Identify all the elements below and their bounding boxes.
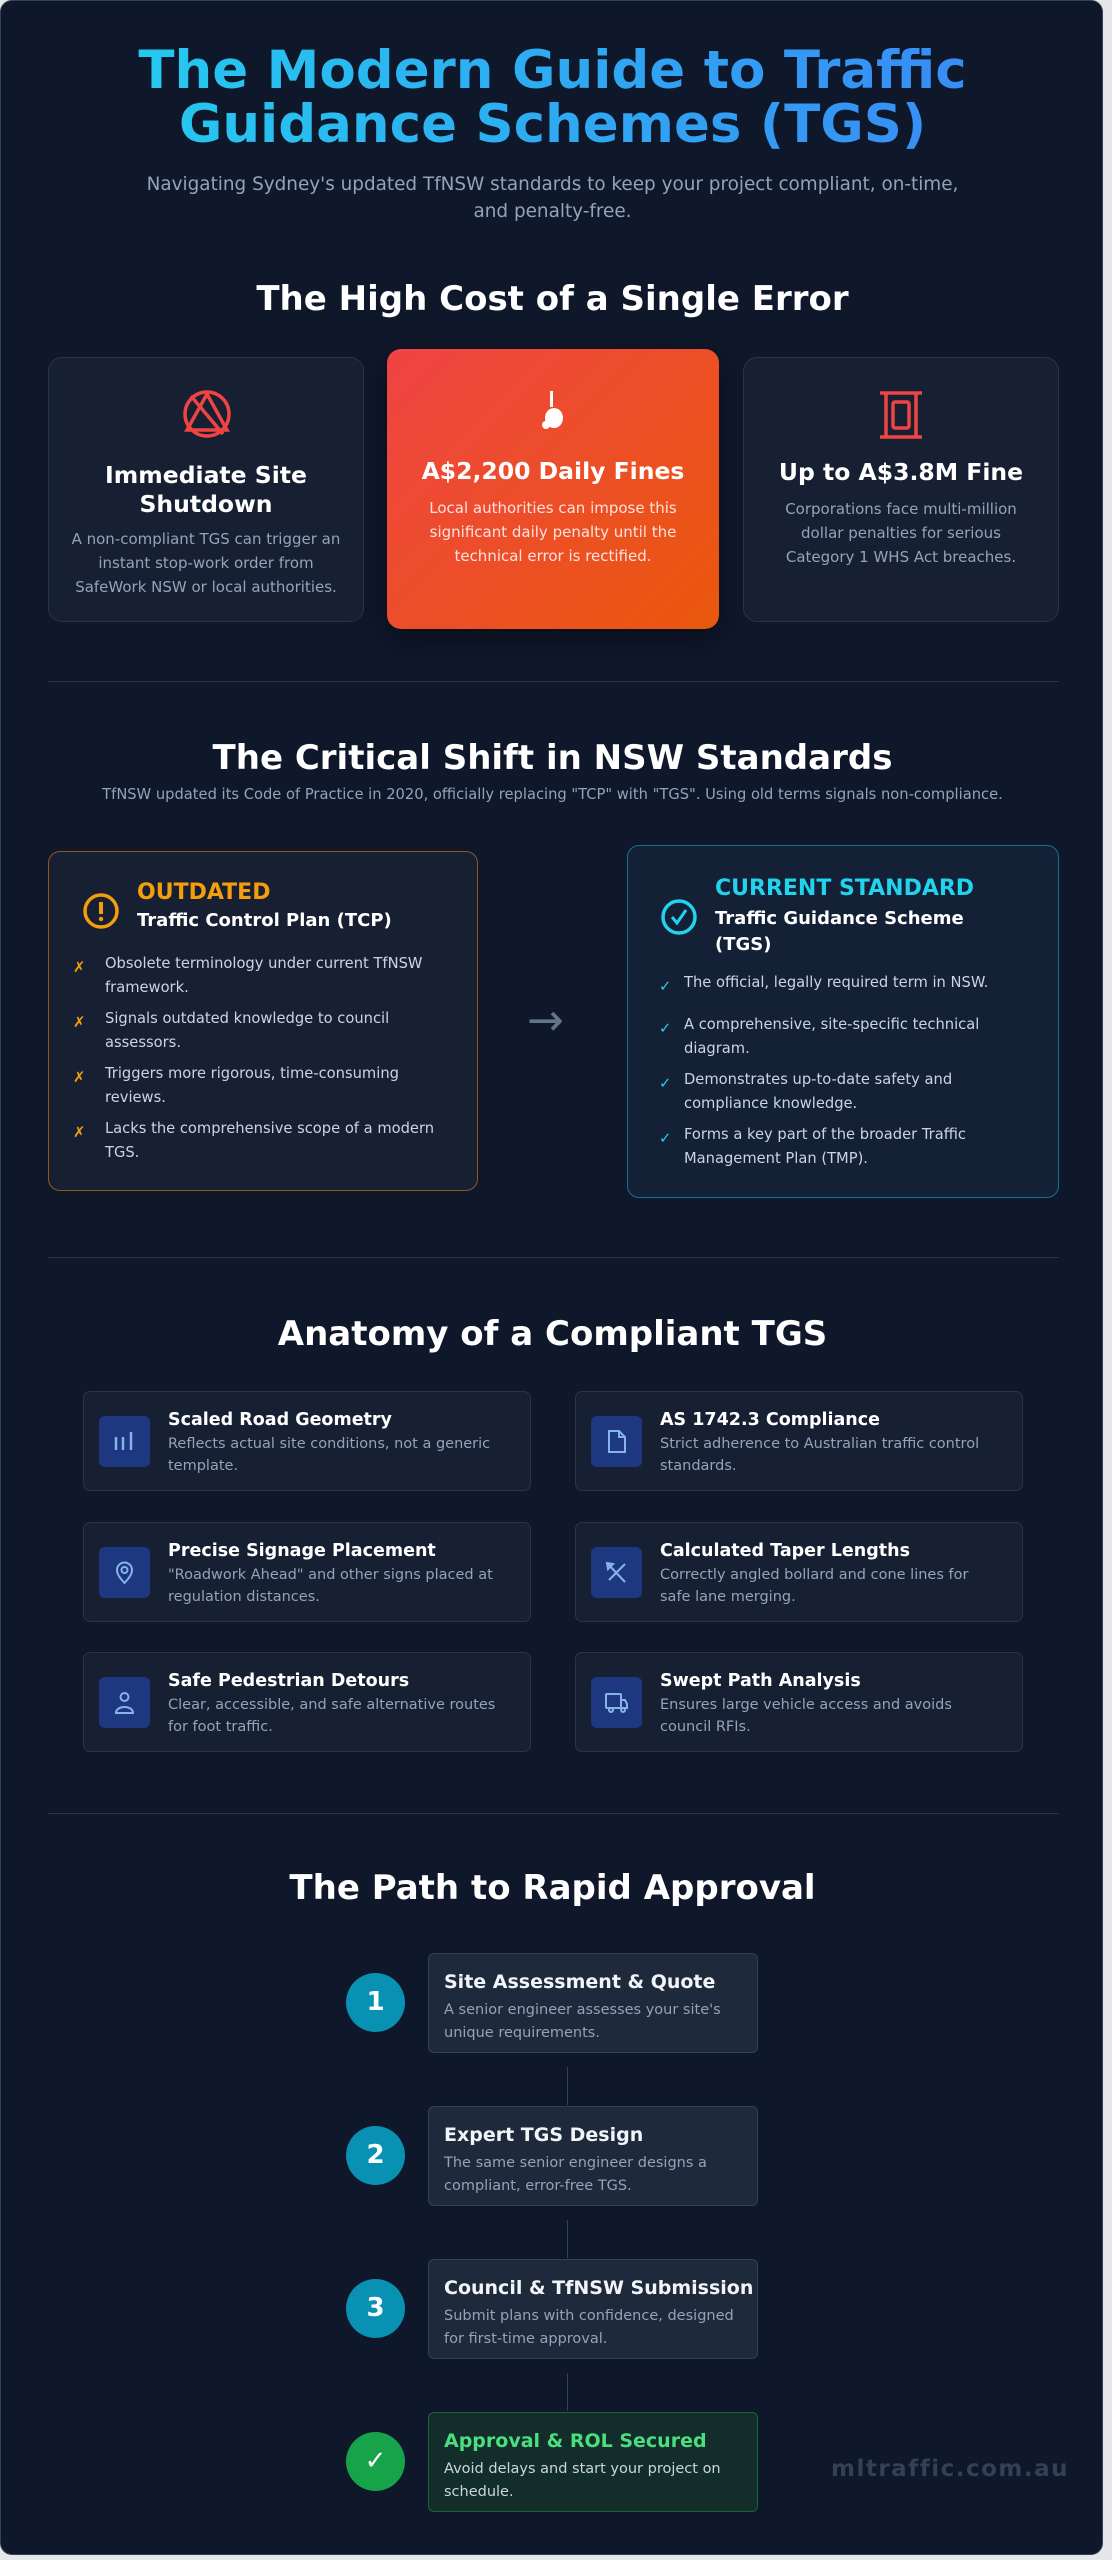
icon: shutdown (183, 390, 231, 438)
icon: hand (542, 391, 563, 429)
feature: AS 1742.3 (575, 1391, 1023, 1491)
step 4: approval: Approval & ROL Secured (444, 2430, 707, 2452)
panel: outdated (48, 851, 478, 1191)
card: 3.8M fine: Up to A$3.8M Fine (779, 458, 1023, 486)
icon: building (880, 391, 922, 439)
card: site shutdown (48, 357, 364, 622)
watermark: mltraffic.com.au (831, 2456, 1069, 2482)
step 3 (346, 2259, 758, 2359)
step 3: Submit plans with confidence, designed for first-time approval. (444, 2308, 734, 2347)
panel: outdated: ✗ (73, 1014, 85, 1031)
list: current points: A comprehensive, site-specific technical diagram. (684, 1016, 979, 1057)
feature: scaled road geometry: Scaled Road Geometry (168, 1410, 392, 1430)
panel: outdated: ✗ (73, 1069, 85, 1086)
step 3: Council & TfNSW Submission (444, 2277, 753, 2299)
card: site shutdown: Immediate Site (105, 461, 307, 489)
feature: signage placement (83, 1522, 531, 1622)
feature: taper lengths: Calculated Taper Lengths (660, 1541, 910, 1561)
list: outdated points: Lacks the comprehensive scope of a modern TGS. (105, 1120, 434, 1161)
panel: outdated: ✗ (73, 1124, 85, 1141)
feature: scaled road geometry (83, 1391, 531, 1491)
card: site shutdown: Shutdown (139, 490, 273, 518)
subtitle: and penalty-free. (474, 201, 631, 222)
step 1: Site Assessment & Quote (444, 1971, 715, 1993)
feature: AS 1742.3: Strict adherence to Australian traffic control standards. (660, 1436, 979, 1474)
panel: current standard: ✓ (659, 978, 671, 995)
subtitle (147, 174, 958, 222)
card: site shutdown: A non-compliant TGS can trigger an instant stop-work order from SafeWork NSW or local authorities. (72, 530, 340, 596)
icon: warning (83, 893, 119, 929)
list: outdated points (73, 955, 434, 1161)
list: outdated points: Obsolete terminology under current TfNSW framework. (105, 955, 422, 996)
arrow: → (527, 995, 564, 1046)
title: Guidance Schemes (TGS) (179, 94, 926, 155)
subheading: shift: TfNSW updated its Code of Practice in 2020, officially replacing "TCP" with "TGS". Using old terms signals non-compliance. (102, 786, 1003, 803)
step 2: Expert TGS Design (444, 2124, 643, 2146)
step 1 (346, 1953, 758, 2053)
feature: swept path: Ensures large vehicle access and avoids council RFIs. (660, 1697, 952, 1735)
panel: current standard: CURRENT STANDARD (715, 876, 974, 901)
feature: taper lengths (575, 1522, 1023, 1622)
feature: scaled road geometry: Reflects actual site conditions, not a generic template. (168, 1436, 490, 1474)
step 1: 1 (366, 1987, 385, 2017)
panel: outdated: Traffic Control Plan (TCP) (137, 910, 392, 931)
heading: high cost: The High Cost of a Single Error (256, 279, 849, 319)
step 2: 2 (366, 2140, 385, 2170)
step 1: A senior engineer assesses your site's unique requirements. (444, 2002, 721, 2041)
feature: AS 1742.3: AS 1742.3 Compliance (660, 1410, 880, 1430)
list: outdated points: Triggers more rigorous, time-consuming reviews. (105, 1065, 399, 1106)
step 4: approval: Avoid delays and start your project on schedule. (444, 2461, 721, 2500)
panel: outdated: ✗ (73, 959, 85, 976)
heading: path to approval: The Path to Rapid Approval (289, 1868, 816, 1908)
heading: anatomy: Anatomy of a Compliant TGS (278, 1314, 827, 1354)
feature: signage placement: Precise Signage Placement (168, 1541, 436, 1561)
subtitle: Navigating Sydney's updated TfNSW standards to keep your project compliant, on-time, (147, 174, 958, 195)
panel: current standard (627, 845, 1059, 1198)
feature: swept path (575, 1652, 1023, 1752)
panel: current standard: Traffic Guidance Scheme (TGS) (715, 908, 964, 955)
title (1, 44, 1104, 152)
panel: current standard: ✓ (659, 1130, 671, 1147)
feature: taper lengths: Correctly angled bollard and cone lines for safe lane merging. (660, 1567, 968, 1605)
heading: critical shift: The Critical Shift in NSW Standards (213, 738, 892, 778)
step 4: approval (346, 2412, 758, 2512)
panel: current standard: ✓ (659, 1075, 671, 1092)
panel: outdated: OUTDATED (137, 880, 270, 905)
card: daily fines: A$2,200 Daily Fines (422, 457, 684, 485)
list: current points (659, 974, 988, 1167)
title: The Modern Guide to Traffic (138, 40, 967, 101)
step 4: approval: ✓ (365, 2446, 386, 2476)
panel: current standard: ✓ (659, 1020, 671, 1037)
step 2: The same senior engineer designs a compliant, error-free TGS. (444, 2155, 707, 2194)
feature: pedestrian detours: Clear, accessible, and safe alternative routes for foot traffic. (168, 1697, 495, 1735)
card: 3.8M fine (743, 357, 1059, 622)
feature: pedestrian detours (83, 1652, 531, 1752)
card: daily fines: Local authorities can impose this significant daily penalty until the technical error is rectified. (429, 499, 677, 565)
step 3: 3 (366, 2293, 385, 2323)
feature: pedestrian detours: Safe Pedestrian Detours (168, 1671, 409, 1691)
list: current points: Demonstrates up-to-date safety and compliance knowledge. (684, 1071, 952, 1112)
card: 3.8M fine: Corporations face multi-million dollar penalties for serious Category 1 WHS Act breaches. (785, 500, 1017, 566)
list: current points: The official, legally required term in NSW. (684, 974, 988, 991)
feature: signage placement: "Roadwork Ahead" and other signs placed at regulation distances. (168, 1567, 493, 1605)
icon: check circle (661, 899, 697, 935)
feature: swept path: Swept Path Analysis (660, 1671, 861, 1691)
card: daily fines (387, 349, 719, 629)
list: outdated points: Signals outdated knowledge to council assessors. (105, 1010, 389, 1051)
step 2 (346, 2106, 758, 2206)
list: current points: Forms a key part of the broader Traffic Management Plan (TMP). (684, 1126, 966, 1167)
